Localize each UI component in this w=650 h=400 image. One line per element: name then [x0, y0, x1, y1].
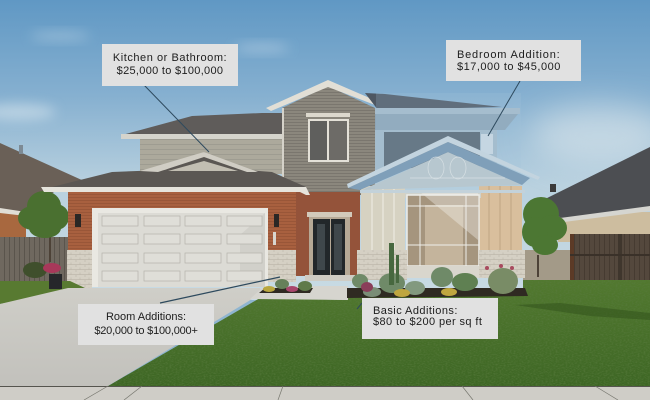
blueprint overlay rectangle — [376, 93, 521, 193]
trees — [18, 191, 567, 277]
label: bedroom addition: $17,000 to $45,000 — [457, 61, 561, 73]
label: kitchen or bathroom: Kitchen or Bathroom: — [113, 52, 227, 64]
front door — [305, 212, 355, 281]
addition gable roof outline — [347, 136, 540, 193]
label: room additions — [78, 304, 214, 345]
stone base of addition — [357, 250, 525, 280]
garage brick wall — [68, 192, 360, 276]
lawn and ground — [0, 270, 650, 400]
label: kitchen or bathroom — [102, 44, 238, 86]
icon: garage wall lamps — [75, 214, 279, 245]
label: basic additions: $80 to $200 per sq ft — [373, 316, 482, 328]
label: bedroom addition — [446, 40, 581, 81]
sky — [0, 0, 650, 300]
label: basic additions — [362, 298, 498, 339]
label: bedroom addition: Bedroom Addition: — [457, 49, 560, 61]
second storey left wing — [121, 113, 282, 174]
second storey right addition roof and wall — [365, 93, 520, 170]
second storey main gable — [266, 80, 395, 195]
label: room additions: $20,000 to $100,000+ — [94, 325, 198, 337]
ground floor addition with glass — [361, 186, 522, 266]
label: room additions: Room Additions: — [106, 311, 186, 323]
left neighbor house — [0, 143, 84, 238]
garage roof — [41, 152, 310, 195]
stone base — [67, 250, 296, 288]
fences — [0, 234, 650, 281]
flower beds — [23, 243, 528, 298]
connector lines — [144, 81, 520, 309]
label: kitchen or bathroom: $25,000 to $100,000 — [117, 65, 223, 77]
garage door — [92, 208, 268, 287]
right neighbor house — [537, 147, 650, 242]
label: basic additions: Basic Additions: — [373, 305, 458, 317]
